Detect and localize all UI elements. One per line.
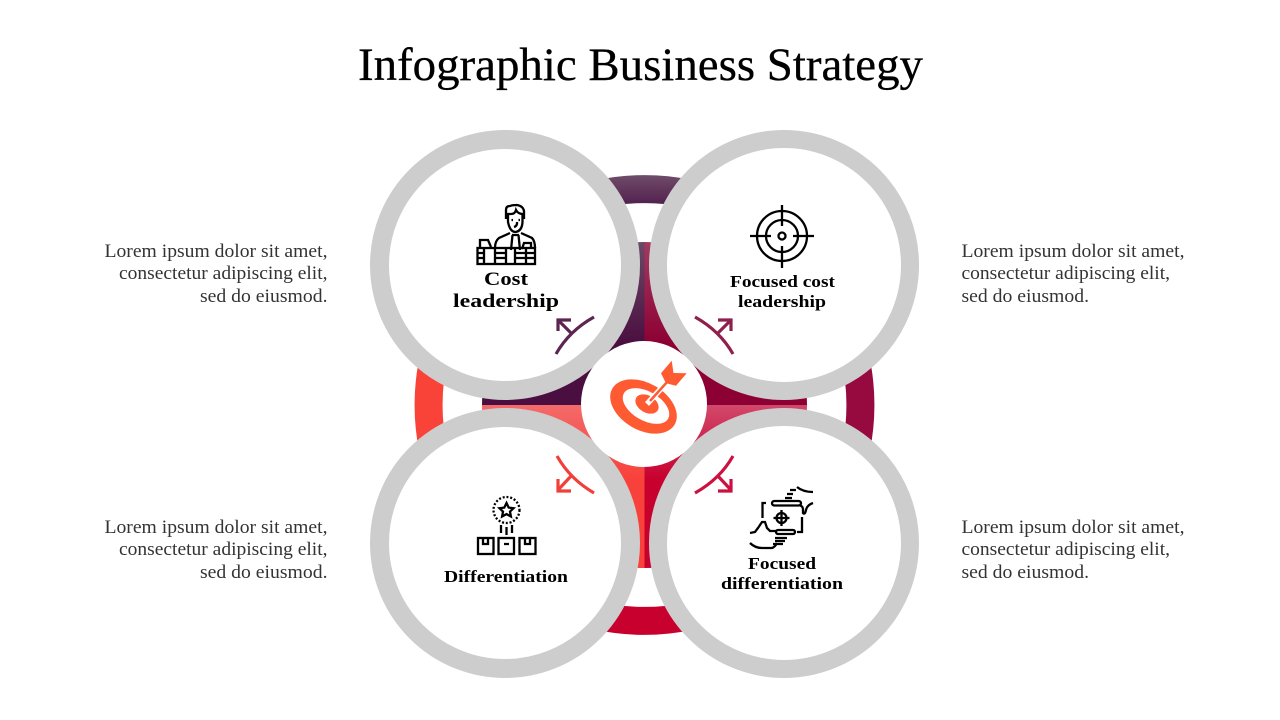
label: differentiation: Differentiation — [444, 567, 568, 586]
text block: top left: Lorem ipsum dolor sit amet, — [104, 242, 328, 262]
label: focused cost leadership: leadership — [738, 292, 826, 311]
text block: top left — [104, 242, 328, 307]
text block: top right: consectetur adipiscing elit, — [962, 264, 1170, 284]
text block: top right — [962, 242, 1184, 307]
text block: top right: sed do eiusmod. — [962, 287, 1089, 307]
label: focused differentiation: differentiation — [721, 574, 843, 593]
text block: bottom left: sed do eiusmod. — [200, 563, 328, 583]
circle: differentiation — [380, 418, 630, 668]
center white circle — [581, 341, 707, 467]
text block: bottom right — [962, 518, 1184, 583]
circle: focused cost leadership — [658, 139, 910, 391]
text block: bottom right: consectetur adipiscing elit, — [962, 540, 1170, 560]
label: cost leadership: Cost — [484, 269, 529, 290]
icon: crosshair — [750, 205, 814, 268]
text block: bottom left — [104, 518, 328, 583]
label: cost leadership: leadership — [453, 291, 559, 312]
text block: top left: consectetur adipiscing elit, — [119, 264, 328, 284]
arrow: bottom right — [695, 456, 733, 493]
icon: star medal and boxes — [478, 497, 536, 554]
text block: bottom left: Lorem ipsum dolor sit amet, — [104, 518, 328, 538]
label: focused differentiation — [721, 554, 843, 593]
icon: framing hands around target — [750, 487, 813, 548]
circle: focused differentiation — [658, 417, 910, 669]
inner quartered disc — [482, 242, 807, 568]
circle: cost leadership — [380, 140, 630, 390]
text block: top left: sed do eiusmod. — [200, 287, 328, 307]
label: focused cost leadership: Focused cost — [730, 272, 836, 291]
icon: businessman with money stacks — [478, 205, 535, 264]
title: Infographic Business Strategy — [358, 39, 923, 91]
outer segmented ring — [429, 189, 860, 621]
arrow: bottom left — [557, 456, 594, 493]
arrow: top left — [556, 317, 594, 354]
text block: bottom right: Lorem ipsum dolor sit amet, — [962, 518, 1184, 538]
label: focused differentiation: Focused — [748, 554, 816, 573]
text block: bottom right: sed do eiusmod. — [962, 563, 1089, 583]
text block: top right: Lorem ipsum dolor sit amet, — [962, 242, 1184, 262]
icon: target with arrow — [601, 361, 687, 445]
label: cost leadership — [453, 269, 559, 312]
text block: bottom left: consectetur adipiscing elit, — [119, 540, 328, 560]
arrow: top right — [695, 317, 733, 354]
label: focused cost leadership — [730, 272, 836, 311]
